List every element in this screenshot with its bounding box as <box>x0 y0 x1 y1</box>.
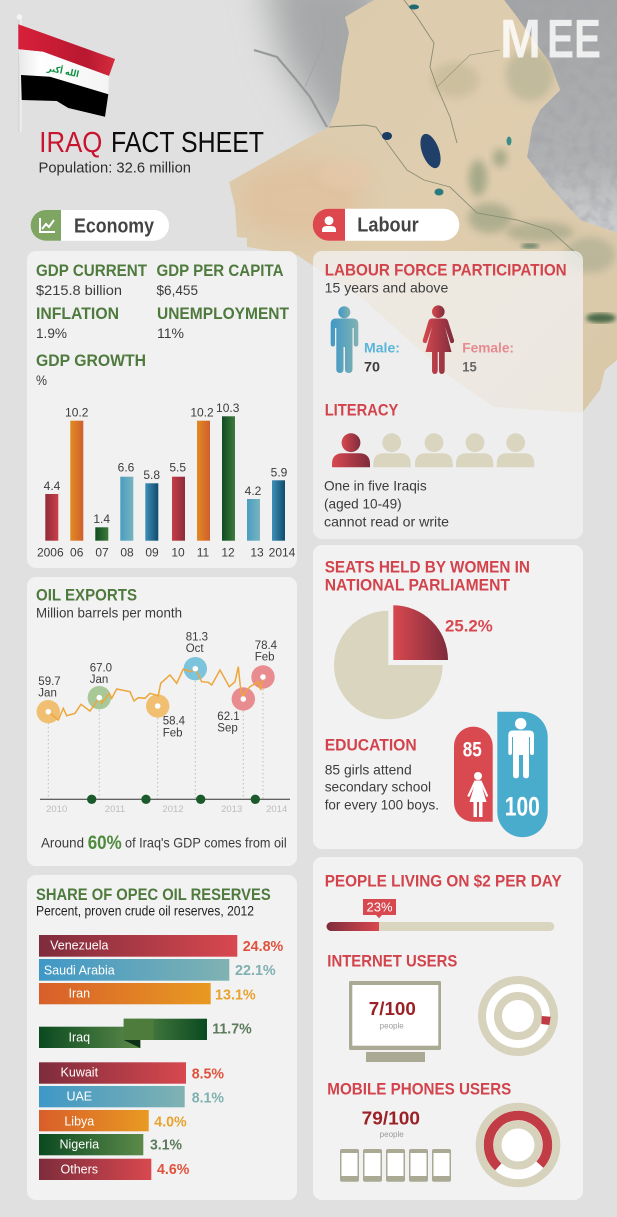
oil exports subheading: Million barrels per month <box>36 605 182 621</box>
line chart: oil exports: Feb <box>163 728 183 740</box>
bar: Iran: 13.1% <box>215 986 256 1003</box>
pie chart: seats held by women: 25.2% <box>445 618 493 636</box>
education text <box>325 761 439 812</box>
bar chart: GDP growth: 2006 <box>37 546 64 560</box>
seats heading <box>325 557 530 595</box>
education text: secondary school <box>325 779 431 795</box>
line chart: oil exports: Feb <box>255 652 275 664</box>
GDP growth heading: % <box>36 372 47 388</box>
line chart: oil exports: 2011 <box>105 804 125 815</box>
literacy text: cannot read or write <box>324 514 449 530</box>
donut chart: internet users <box>482 980 554 1052</box>
callout: 60 percent of GDP: 60% <box>88 833 122 854</box>
icon row: five people <box>332 433 534 467</box>
panel: oil exports <box>27 577 297 866</box>
OPEC heading: SHARE OF OPEC OIL RESERVES <box>36 885 271 904</box>
GDP per capita <box>156 261 284 298</box>
title: IRAQ <box>39 127 102 159</box>
line chart: oil exports: Sep <box>217 722 238 734</box>
education text: 85 girls attend <box>325 761 412 777</box>
literacy text <box>324 478 449 530</box>
mobile phones count <box>362 1108 420 1139</box>
bar: Kuwait: 8.5% <box>192 1065 224 1082</box>
bar: Iran <box>39 983 256 1004</box>
inflation: 1.9% <box>36 325 67 341</box>
labour force subheading: 15 years and above <box>325 280 449 296</box>
mobile phones count: people <box>380 1130 404 1139</box>
bar: Saudi Arabia: Saudi Arabia <box>44 964 115 978</box>
pictogram: boys 100: 100 <box>505 792 540 822</box>
bar chart: GDP growth: 4.2 <box>245 484 262 498</box>
bar: Iran: Iran <box>69 987 90 1001</box>
GDP current: GDP CURRENT <box>36 261 148 280</box>
bar chart: GDP growth: 09 <box>145 546 159 560</box>
bar: Kuwait <box>39 1062 224 1084</box>
donut chart: mobile phone users <box>480 1107 556 1183</box>
inflation <box>36 304 119 341</box>
line chart: oil exports: 2010 <box>46 804 67 815</box>
bar chart: GDP growth: 5.9 <box>271 466 288 480</box>
callout: 60 percent of GDP: of Iraq's GDP comes from oil <box>125 835 287 851</box>
line chart: oil exports: 2012 <box>162 804 184 815</box>
callout: 60 percent of GDP <box>41 833 287 854</box>
bar chart: GDP growth: 11 <box>197 546 210 560</box>
line chart: oil exports: Oct <box>186 643 204 655</box>
bar: Libya: 4.0% <box>154 1114 187 1131</box>
unemployment: 11% <box>157 325 184 341</box>
bar: Libya <box>39 1110 187 1131</box>
icon: computer monitor <box>349 981 441 1062</box>
GDP per capita: GDP PER CAPITA <box>156 261 284 280</box>
line chart: oil exports: 2014 <box>266 804 287 815</box>
mobile phones count: 79/100 <box>362 1108 420 1128</box>
line chart: oil exports: 58.4 <box>163 715 186 727</box>
bar: Nigeria: 3.1% <box>150 1137 182 1154</box>
bar chart: GDP growth: 10.2 <box>190 406 214 420</box>
OPEC subheading: Percent, proven crude oil reserves, 2012 <box>36 903 254 919</box>
icon row: five phones <box>340 1149 451 1182</box>
bar: Venezuela: 24.8% <box>243 938 283 955</box>
title <box>39 127 264 159</box>
pie chart: seats held by women <box>334 605 493 719</box>
MEE logo: M <box>500 8 541 70</box>
seats heading: NATIONAL PARLIAMENT <box>325 576 511 595</box>
bar: Nigeria: Nigeria <box>59 1138 99 1152</box>
GDP current <box>36 261 148 298</box>
bar: UAE: UAE <box>66 1090 92 1104</box>
bar chart: GDP growth: 06 <box>70 546 84 560</box>
female label: 15 <box>462 359 477 375</box>
icon: female figure <box>423 305 454 374</box>
bar: Others: Others <box>61 1162 98 1176</box>
bar: Iraq ribbon <box>39 1019 252 1048</box>
MEE logo <box>500 8 601 70</box>
bar: Venezuela <box>39 935 283 957</box>
bar chart: GDP growth: 12 <box>221 546 235 560</box>
pictogram: girls 85: 85 <box>463 739 482 762</box>
bar: Saudi Arabia: 22.1% <box>235 962 276 979</box>
pictogram: girls 85 <box>454 727 493 822</box>
bar: Others: 4.6% <box>157 1161 189 1178</box>
panel: poverty and connectivity <box>313 857 583 1200</box>
population: Population: 32.6 million <box>38 160 191 177</box>
unemployment: UNEMPLOYMENT <box>157 304 290 323</box>
bar: Iraq ribbon: Iraq <box>69 1031 90 1045</box>
GDP current: $215.8 billion <box>36 282 122 298</box>
bar chart: GDP growth: 5.8 <box>143 468 160 482</box>
seats heading: SEATS HELD BY WOMEN IN <box>325 557 530 576</box>
education text: for every 100 boys. <box>325 796 439 812</box>
GDP per capita: $6,455 <box>156 282 198 298</box>
male label <box>364 340 400 375</box>
section header: Economy: Economy <box>74 215 155 237</box>
education heading: EDUCATION <box>325 736 417 755</box>
literacy text: One in five Iraqis <box>324 478 427 494</box>
icon: computer monitor: people <box>380 1021 404 1030</box>
icon: line chart <box>40 218 55 232</box>
icon: Iraqi flag <box>17 14 115 132</box>
panel: economy <box>27 251 297 568</box>
section header: Economy <box>31 210 169 241</box>
line chart: oil exports: 62.1 <box>217 711 240 723</box>
male label: 70 <box>364 359 380 375</box>
literacy text: (aged 10-49) <box>324 495 402 511</box>
male label: Male: <box>364 340 400 356</box>
mobile phones heading: MOBILE PHONES USERS <box>327 1079 511 1098</box>
bar: Others <box>39 1159 189 1180</box>
pictogram: boys 100 <box>497 712 548 837</box>
line chart: oil exports <box>37 632 290 815</box>
section header: Labour: Labour <box>357 215 419 237</box>
inflation: INFLATION <box>36 304 119 323</box>
internet users heading: INTERNET USERS <box>327 952 457 971</box>
bar chart: GDP growth: 6.6 <box>118 461 135 475</box>
callout: 60 percent of GDP: Around <box>41 835 84 851</box>
poverty heading: PEOPLE LIVING ON $2 PER DAY <box>325 872 562 891</box>
bar chart: GDP growth <box>37 401 296 560</box>
GDP growth heading <box>36 351 146 388</box>
bar: Saudi Arabia <box>39 959 276 981</box>
bar: Venezuela: Venezuela <box>50 939 109 953</box>
oil exports heading: OIL EXPORTS <box>36 586 137 605</box>
title: FACT SHEET <box>111 127 264 159</box>
GDP growth heading: GDP GROWTH <box>36 351 146 370</box>
icon: computer monitor: 7/100 <box>369 999 416 1019</box>
bar chart: GDP growth: 13 <box>250 546 264 560</box>
bar chart: GDP growth: 4.4 <box>44 479 61 493</box>
line chart: oil exports: 2013 <box>221 804 242 815</box>
bar chart: GDP growth: 07 <box>95 546 109 560</box>
unemployment <box>157 304 290 341</box>
icon: male figure <box>331 306 358 373</box>
bar chart: GDP growth: 08 <box>120 546 134 560</box>
bar chart: GDP growth: 10.3 <box>216 401 240 415</box>
progress bar: 23 percent <box>326 899 554 931</box>
bar: UAE <box>39 1086 224 1107</box>
icon: Iraqi flag: الله أكبر <box>45 62 80 80</box>
female label: Female: <box>462 340 514 356</box>
bar: Kuwait: Kuwait <box>61 1066 99 1080</box>
progress bar: 23 percent: 23% <box>366 900 393 915</box>
bar chart: GDP growth: 2014 <box>269 546 296 560</box>
bar: Libya: Libya <box>64 1115 94 1129</box>
bar: UAE: 8.1% <box>192 1090 224 1107</box>
bar chart: GDP growth: 10 <box>171 546 185 560</box>
section header: Labour <box>313 209 459 241</box>
line chart: oil exports: 78.4 <box>255 640 278 652</box>
panel: labour force and literacy <box>313 251 583 539</box>
line chart: oil exports: Jan <box>90 674 108 686</box>
line chart: oil exports: 81.3 <box>186 632 208 644</box>
bar chart: GDP growth: 10.2 <box>65 406 89 420</box>
bar: Nigeria <box>39 1134 182 1155</box>
line chart: oil exports: Jan <box>38 688 57 700</box>
panel: seats and education <box>313 545 583 849</box>
line chart: oil exports: 67.0 <box>90 663 112 675</box>
bar: Iraq ribbon: 11.7% <box>212 1020 252 1037</box>
icon: person <box>322 216 336 232</box>
bar chart: GDP growth: 1.4 <box>93 512 110 526</box>
background map of Iraq <box>229 0 617 413</box>
panel: OPEC reserves <box>27 875 297 1200</box>
female label <box>462 340 514 375</box>
line chart: oil exports: 59.7 <box>38 676 61 688</box>
labour force heading: LABOUR FORCE PARTICIPATION <box>325 261 567 280</box>
literacy heading: LITERACY <box>325 401 399 420</box>
bar chart: GDP growth: 5.5 <box>169 461 186 475</box>
